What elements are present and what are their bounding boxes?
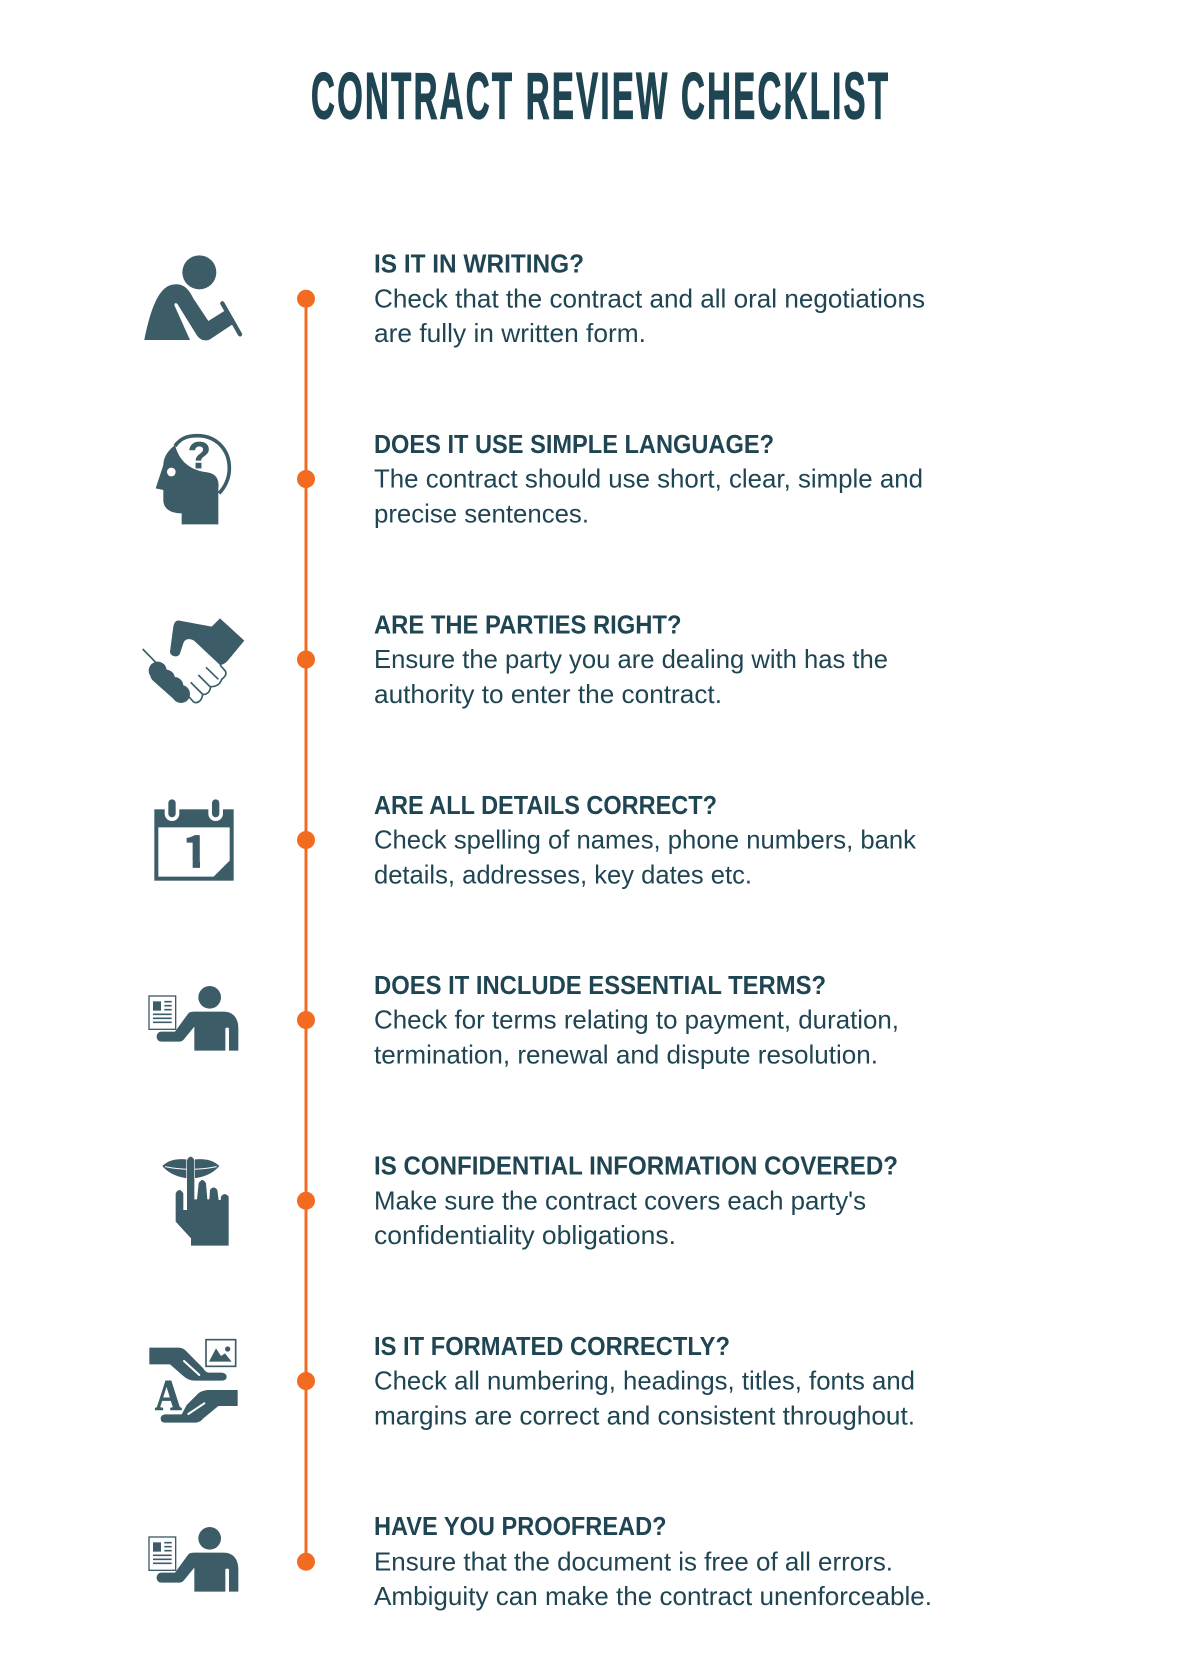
item 4 text: details, addresses, key dates etc. xyxy=(374,859,752,889)
item 7 text: Check all numbering, headings, titles, fonts and xyxy=(374,1366,915,1396)
item 8 text xyxy=(374,1511,932,1611)
item 4 text: ARE ALL DETAILS CORRECT? xyxy=(374,790,717,820)
icon: calendar xyxy=(154,799,234,881)
item 6 text: Make sure the contract covers each party's xyxy=(374,1185,866,1215)
icon: person presenting document (proofread) xyxy=(149,1527,238,1592)
item 7 text xyxy=(374,1331,915,1430)
item 2 text xyxy=(374,429,923,528)
item 3 text: authority to enter the contract. xyxy=(374,679,722,709)
item 7 text: IS IT FORMATED CORRECTLY? xyxy=(374,1331,730,1361)
icon: finger on lips xyxy=(162,1157,229,1246)
item 1 text xyxy=(374,249,925,348)
item 5 text: DOES IT INCLUDE ESSENTIAL TERMS? xyxy=(374,970,826,1000)
icon: person writing xyxy=(144,255,240,340)
item 6 text: IS CONFIDENTIAL INFORMATION COVERED? xyxy=(374,1150,898,1180)
item 7 text: margins are correct and consistent throughout. xyxy=(374,1400,915,1430)
item 1 text: IS IT IN WRITING? xyxy=(374,249,584,279)
item 6 text xyxy=(374,1150,898,1250)
item 8 text: Ensure that the document is free of all errors. xyxy=(374,1546,893,1576)
item 1 text: Check that the contract and all oral negotiations xyxy=(374,283,925,313)
item 6 text: confidentiality obligations. xyxy=(374,1220,676,1250)
item 2 text: The contract should use short, clear, simple and xyxy=(374,464,923,494)
item 5 text: termination, renewal and dispute resolution. xyxy=(374,1039,878,1069)
icon: calendar: 1 xyxy=(182,816,208,880)
item 1 text: are fully in written form. xyxy=(374,318,646,348)
item 3 text: Ensure the party you are dealing with has the xyxy=(374,644,888,674)
item 8 text: HAVE YOU PROOFREAD? xyxy=(374,1511,666,1541)
item 2 text: DOES IT USE SIMPLE LANGUAGE? xyxy=(374,429,774,459)
item 5 text: Check for terms relating to payment, duration, xyxy=(374,1005,899,1035)
timeline xyxy=(297,290,315,1571)
icon: head with question mark xyxy=(156,434,229,524)
item 3 text xyxy=(374,610,888,709)
title: CONTRACT REVIEW CHECKLIST xyxy=(311,60,888,134)
item 5 text xyxy=(374,970,899,1069)
icon: hands exchanging image and letter xyxy=(149,1340,238,1423)
icon: head with question mark: ? xyxy=(188,434,211,476)
icon: person presenting document xyxy=(149,986,238,1051)
icon: handshake xyxy=(143,618,244,703)
item 2 text: precise sentences. xyxy=(374,498,589,528)
item 4 text xyxy=(374,790,917,889)
item 3 text: ARE THE PARTIES RIGHT? xyxy=(374,610,682,640)
icon: hands exchanging image and letter: A xyxy=(155,1371,182,1419)
item 4 text: Check spelling of names, phone numbers, bank xyxy=(374,825,917,855)
item 8 text: Ambiguity can make the contract unenforceable. xyxy=(374,1581,932,1611)
